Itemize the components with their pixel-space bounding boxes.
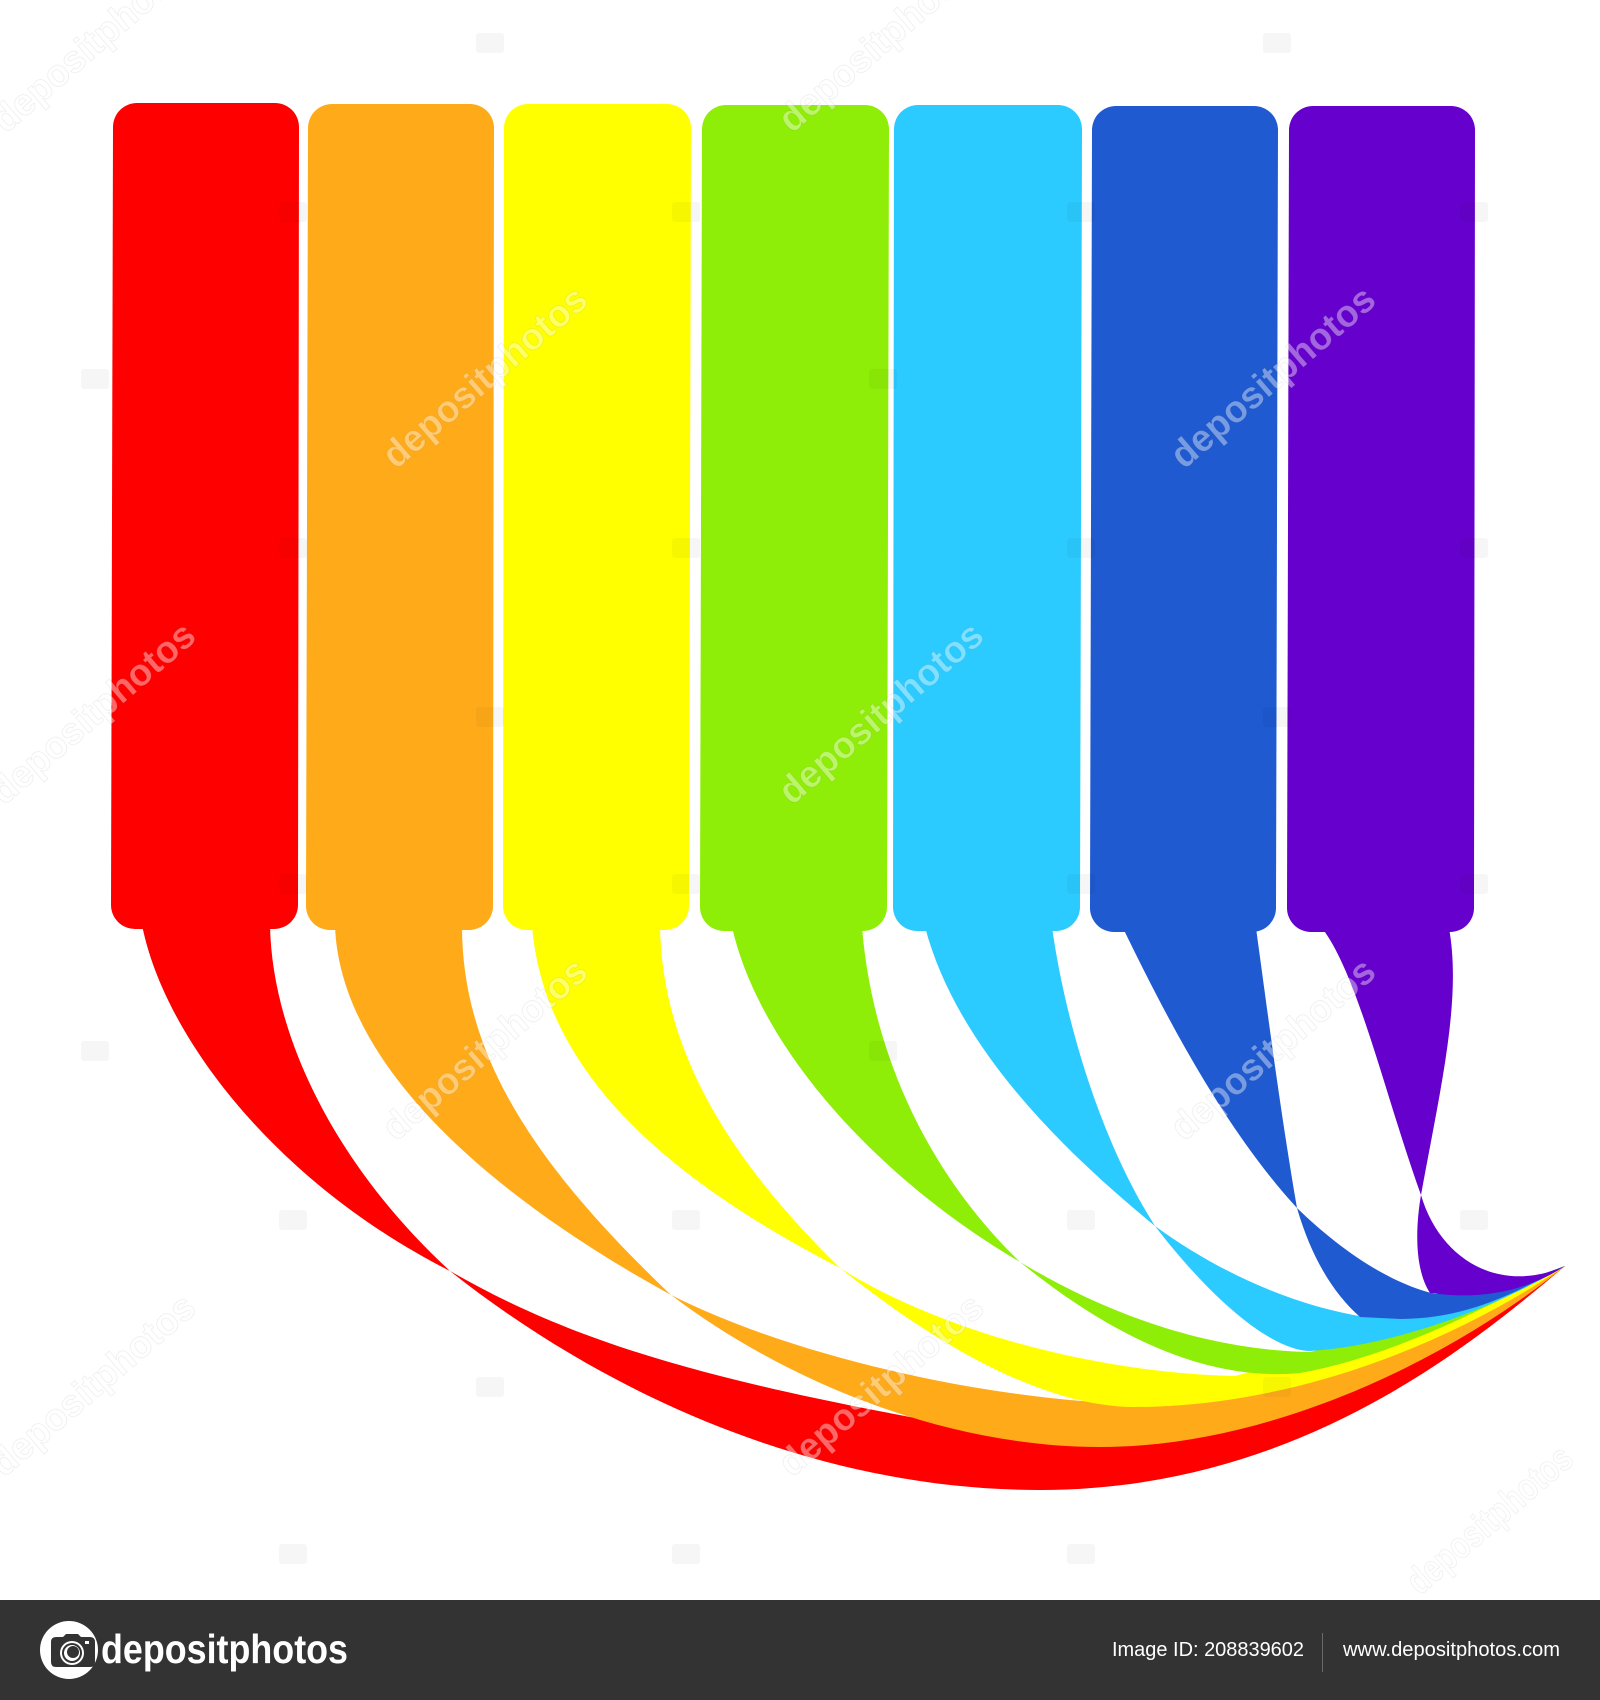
- watermark: repeated stock-photo tiles: depositphotos: [770, 614, 992, 813]
- watermark: faint camera marks: [81, 33, 1488, 1564]
- watermark: repeated stock-photo tiles: depositphotos: [374, 950, 596, 1149]
- watermark: repeated stock-photo tiles: depositphotos: [374, 278, 596, 477]
- watermark: repeated stock-photo tiles: depositphotos: [1162, 278, 1384, 477]
- ribbon: cyan: [893, 105, 1565, 1351]
- ribbon: yellow: [503, 104, 1565, 1407]
- website url: www.depositphotos.com: [1342, 1639, 1560, 1661]
- watermark: repeated stock-photo tiles: depositphotos: [1162, 950, 1384, 1149]
- ribbon: violet: [1287, 106, 1565, 1295]
- image id: Image ID: 208839602: [1112, 1639, 1304, 1661]
- footer bar: [0, 1600, 1600, 1700]
- icon: camera logo: [40, 1621, 98, 1679]
- ribbon: green: [700, 105, 1565, 1374]
- ribbon: blue: [1090, 106, 1565, 1319]
- ribbon: orange: [306, 104, 1565, 1447]
- watermark: repeated stock-photo tiles: depositphotos: [770, 1286, 992, 1485]
- ribbon: red: [111, 103, 1565, 1490]
- logo wordmark: depositphotos: [101, 1626, 348, 1672]
